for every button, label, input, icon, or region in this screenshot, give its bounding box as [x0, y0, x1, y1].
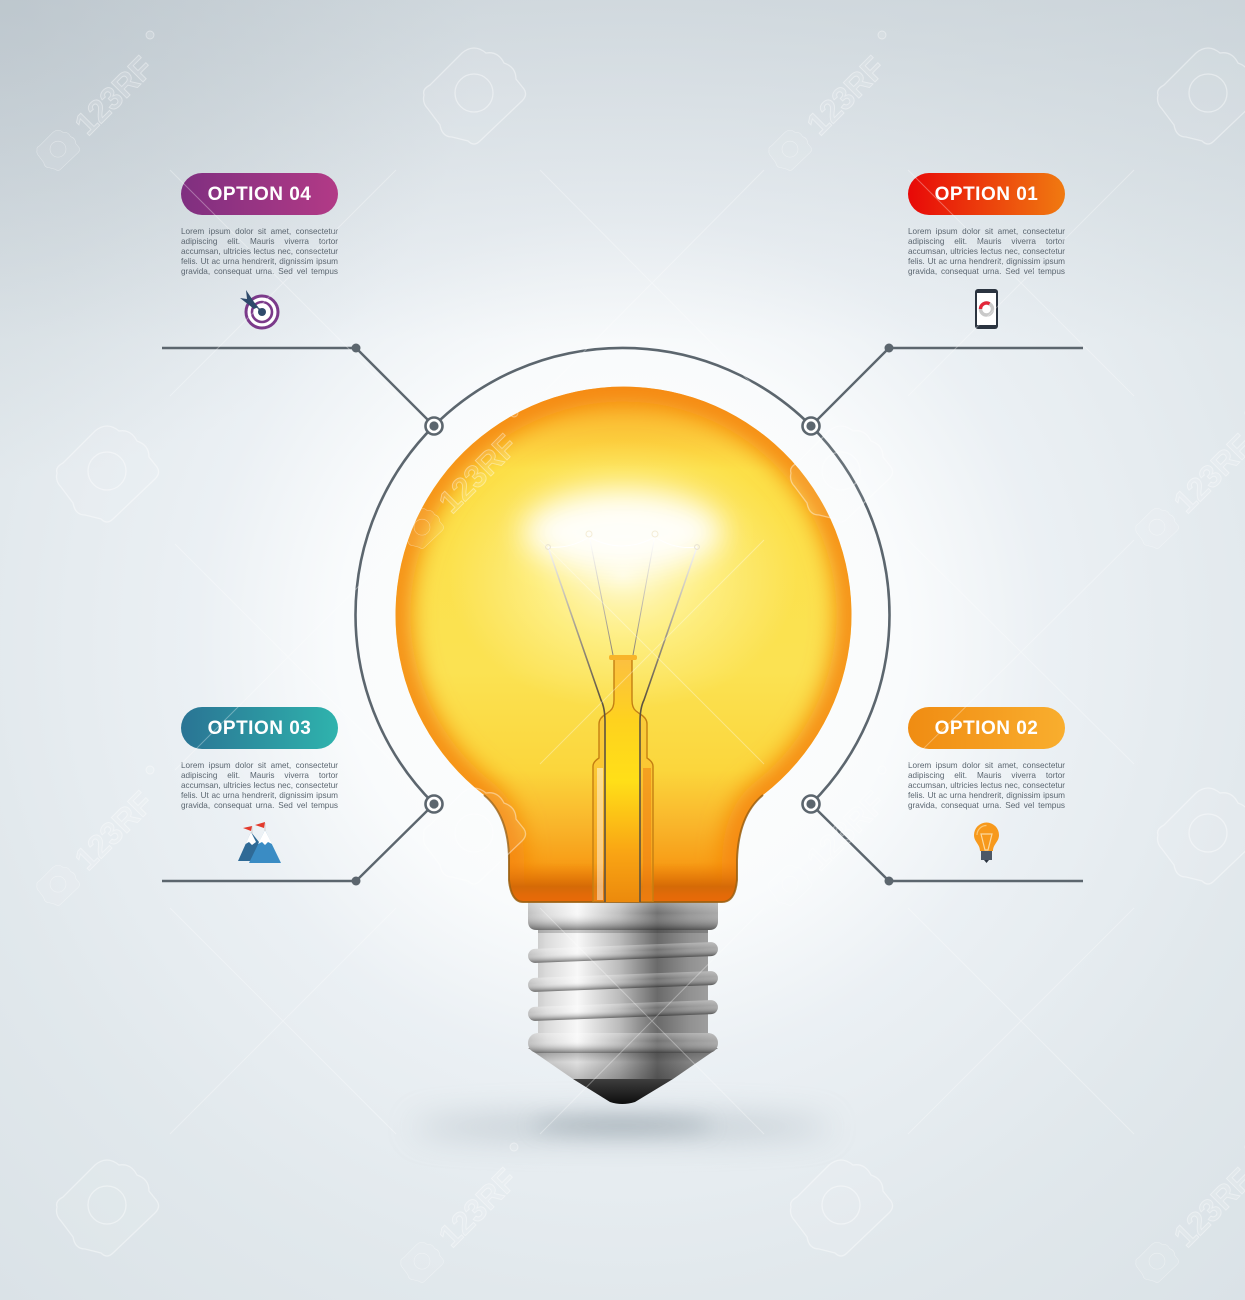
icon: small light bulb	[974, 822, 999, 863]
text block: option 01: accumsan, ultricies lectus nec, consectetur	[908, 247, 1065, 256]
bulb glass	[380, 380, 870, 910]
text block: option 04: felis. Ut ac urna hendrerit, dignissim ipsum	[181, 257, 338, 266]
panel: option 02	[908, 707, 1065, 863]
watermark overlay: 123RF	[67, 784, 160, 877]
panel: option 04	[181, 173, 338, 330]
text block: option 01: adipiscing elit. Mauris viverra tortor	[908, 237, 1065, 246]
pill heading: option 01	[908, 173, 1065, 215]
text block: option 03	[181, 761, 338, 810]
watermark overlay: 123RF	[431, 1161, 524, 1254]
glass stem	[593, 655, 653, 902]
icon: mountains with flags	[238, 822, 281, 863]
connector: option 02	[811, 804, 1083, 886]
text block: option 03: gravida, consequat urna. Sed vel tempus	[181, 801, 338, 810]
text block: option 02: adipiscing elit. Mauris viverra tortor	[908, 771, 1065, 780]
text block: option 03: Lorem ipsum dolor sit amet, consectetur	[181, 761, 338, 770]
pill heading: option 03	[181, 707, 338, 749]
text block: option 02	[908, 761, 1065, 810]
text block: option 03: felis. Ut ac urna hendrerit, dignissim ipsum	[181, 791, 338, 800]
connector: option 01	[811, 344, 1083, 426]
node: upper right	[802, 418, 820, 434]
text block: option 02: felis. Ut ac urna hendrerit, dignissim ipsum	[908, 791, 1065, 800]
text block: option 01	[908, 227, 1065, 276]
icon: target with dart	[240, 290, 280, 330]
text block: option 04: Lorem ipsum dolor sit amet, consectetur	[181, 227, 338, 236]
text block: option 01: felis. Ut ac urna hendrerit, dignissim ipsum	[908, 257, 1065, 266]
pill heading: option 01: OPTION 01	[935, 184, 1038, 205]
connector: option 03	[162, 804, 434, 886]
light bulb	[380, 380, 870, 1104]
outline ring around bulb	[356, 348, 890, 804]
watermark overlay: 123RF	[431, 427, 524, 520]
text block: option 04: adipiscing elit. Mauris viverra tortor	[181, 237, 338, 246]
text block: option 04	[181, 227, 338, 276]
watermark overlay: 123RF	[67, 49, 160, 142]
watermark overlay: 123RF	[799, 49, 892, 142]
text block: option 02: gravida, consequat urna. Sed vel tempus	[908, 801, 1065, 810]
panel: option 03	[181, 707, 338, 863]
text block: option 04: gravida, consequat urna. Sed vel tempus	[181, 267, 338, 276]
pill heading: option 02	[908, 707, 1065, 749]
bulb ground shadow	[412, 1116, 832, 1138]
bulb screw base	[528, 902, 718, 1104]
node: lower left	[426, 796, 442, 812]
text block: option 01: gravida, consequat urna. Sed vel tempus	[908, 267, 1065, 276]
pill heading: option 04	[181, 173, 338, 215]
text block: option 04: accumsan, ultricies lectus nec, consectetur	[181, 247, 338, 256]
connector: option 04	[162, 344, 434, 426]
pill heading: option 03: OPTION 03	[208, 718, 311, 739]
filament wires	[546, 531, 699, 902]
node: lower right	[802, 796, 820, 812]
pill heading: option 02: OPTION 02	[935, 718, 1038, 739]
node: upper left	[426, 418, 442, 434]
pill heading: option 04: OPTION 04	[208, 184, 311, 205]
panel: option 01	[908, 173, 1065, 329]
text block: option 02: accumsan, ultricies lectus nec, consectetur	[908, 781, 1065, 790]
watermark overlay: 123RF	[799, 784, 892, 877]
text block: option 02: Lorem ipsum dolor sit amet, consectetur	[908, 761, 1065, 770]
text block: option 03: accumsan, ultricies lectus nec, consectetur	[181, 781, 338, 790]
glass lower outline	[484, 795, 763, 902]
icon: smartphone with donut chart	[975, 289, 998, 329]
text block: option 03: adipiscing elit. Mauris viverra tortor	[181, 771, 338, 780]
text block: option 01: Lorem ipsum dolor sit amet, consectetur	[908, 227, 1065, 236]
